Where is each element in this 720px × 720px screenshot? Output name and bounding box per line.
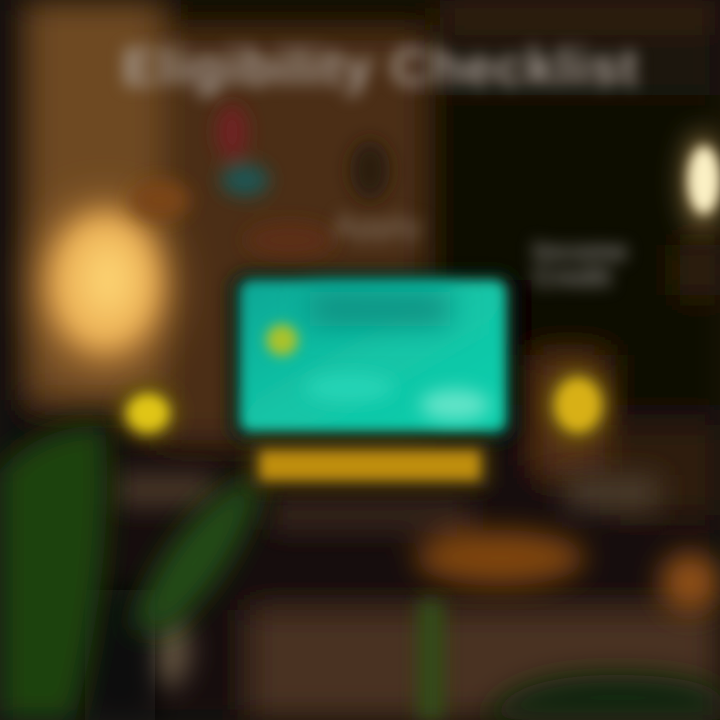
yellow button: [250, 442, 490, 488]
label right of card: Income: [533, 236, 628, 266]
label above card: Apply: [333, 208, 422, 244]
teal card: [230, 272, 516, 442]
label right of card: [526, 236, 634, 296]
yellow circle left: [118, 385, 178, 441]
yellow circle right: [546, 369, 610, 441]
floor bright patch: [141, 612, 189, 688]
furniture: orange seating: [115, 475, 720, 612]
plant leaves: [0, 425, 720, 720]
bright window light: [684, 132, 720, 232]
logo shapes above card: [130, 104, 390, 258]
wall lamp glow: [43, 207, 167, 363]
title: Eligibility Checklist: [122, 38, 639, 97]
label right of card: Credit: [533, 262, 611, 292]
